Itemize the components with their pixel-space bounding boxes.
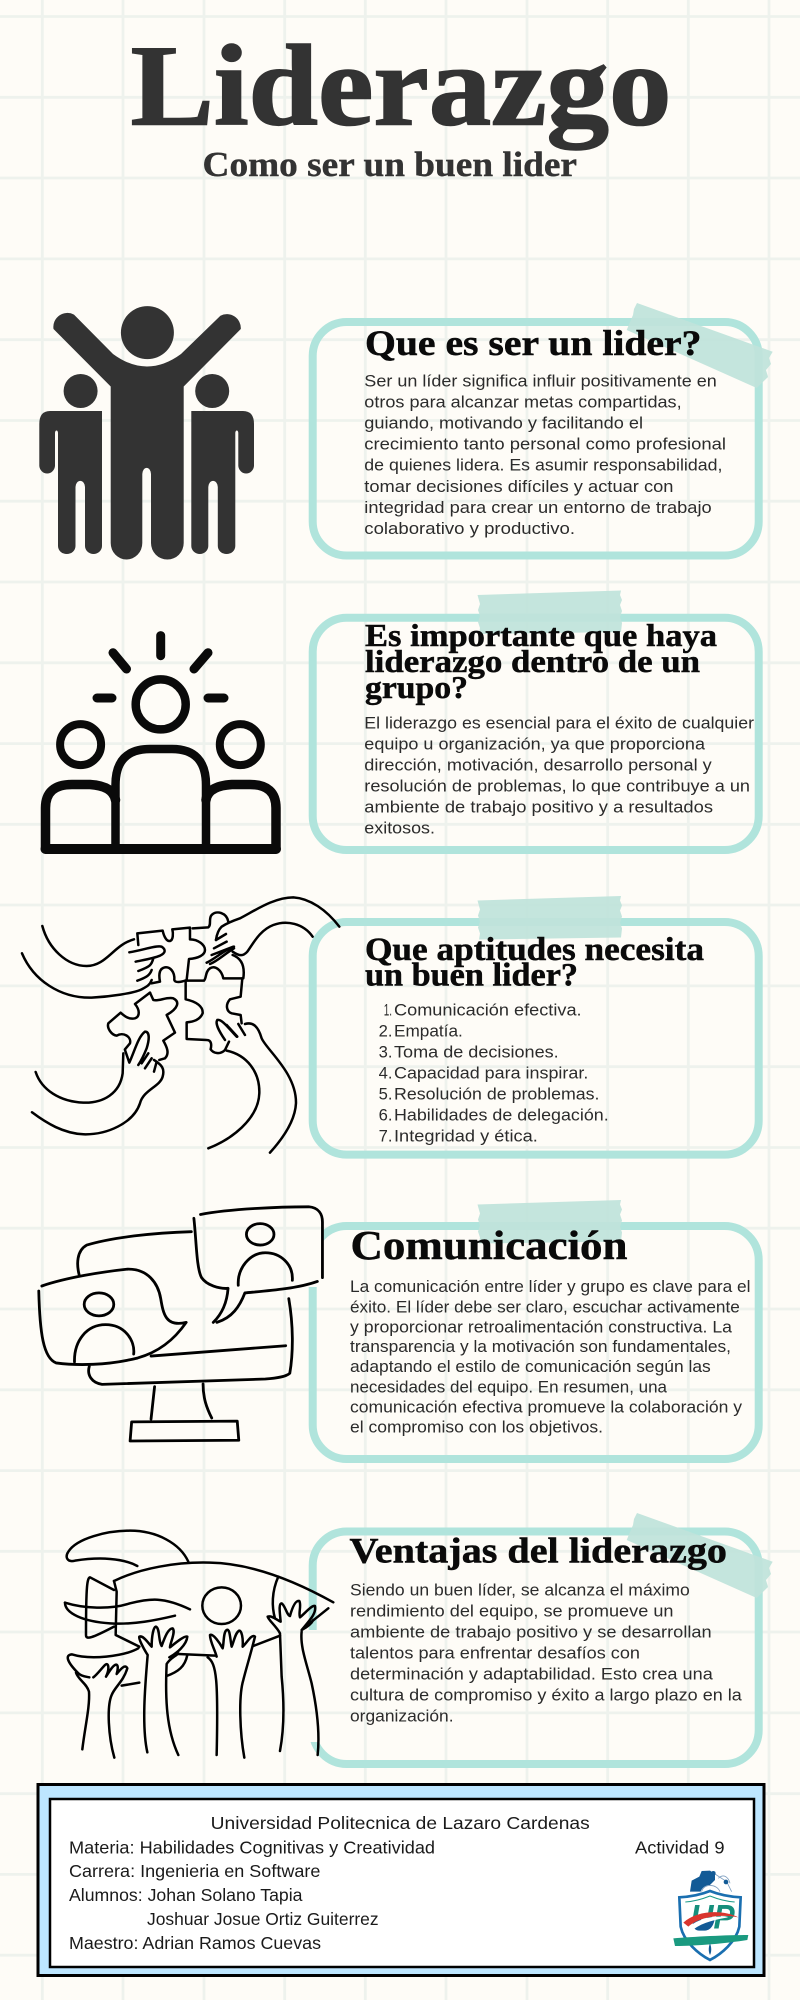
body text: éxito. El líder debe ser claro, escuchar activamente — [350, 1298, 740, 1316]
heading: Ventajas del liderazgo — [350, 1531, 727, 1571]
footer card — [38, 1784, 764, 1976]
body text: ambiente de trabajo positivo y a resultados — [364, 798, 713, 817]
course details: Carrera: Ingenieria en Software — [69, 1861, 320, 1881]
numbered list: Empatía. — [394, 1022, 463, 1041]
body text: otros para alcanzar metas compartidas, — [364, 393, 682, 412]
numbered list: 4. — [379, 1064, 392, 1083]
university name: Universidad Politecnica de Lazaro Cardenas — [211, 1813, 590, 1833]
body text: crecimiento tanto personal como profesional — [364, 435, 726, 454]
numbered list — [379, 1000, 609, 1145]
body text: equipo u organización, ya que proporciona — [364, 734, 706, 754]
numbered list: Toma de decisiones. — [394, 1043, 559, 1062]
body text: cultura de compromiso y éxito a largo plazo en la — [350, 1686, 743, 1704]
numbered list: Resolución de problemas. — [394, 1084, 600, 1103]
icon: rocket lifted by hands — [65, 1531, 333, 1758]
panel: importancia del liderazgo — [313, 590, 759, 850]
numbered list: Habilidades de delegación. — [394, 1105, 609, 1124]
course details: Maestro: Adrian Ramos Cuevas — [69, 1933, 321, 1953]
course details: Joshuar Josue Ortiz Guiterrez — [147, 1909, 379, 1929]
activity label: Actividad 9 — [635, 1837, 724, 1857]
body text: talentos para enfrentar desafíos con — [350, 1643, 640, 1662]
body text: guiando, motivando y facilitando el — [364, 414, 643, 433]
body text: transparencia y la motivación son fundamentales, — [350, 1338, 731, 1356]
body text: colaborativo y productivo. — [364, 519, 575, 538]
body text: Siendo un buen líder, se alcanza el máximo — [350, 1581, 690, 1600]
body text: tomar decisiones difíciles y actuar con — [364, 477, 674, 496]
heading: Es importante que haya — [365, 617, 717, 653]
numbered list: 1. — [384, 1000, 392, 1020]
numbered list: Comunicación efectiva. — [394, 1000, 582, 1020]
heading — [365, 617, 717, 705]
numbered list: Integridad y ética. — [394, 1126, 538, 1145]
panel: aptitudes — [313, 896, 759, 1155]
body text: necesidades del equipo. En resumen, una — [350, 1378, 668, 1396]
course details — [69, 1837, 435, 1953]
body text: Ser un líder significa influir positivamente en — [364, 372, 717, 390]
icon: hands assembling puzzle — [22, 897, 339, 1153]
panel: ventajas del liderazgo — [313, 1513, 773, 1764]
numbered list: 7. — [379, 1126, 392, 1145]
icon: group of people with raised arms — [39, 306, 254, 560]
icon: university shield logo: UP — [691, 1899, 735, 1937]
icon: university shield logo — [673, 1871, 748, 1960]
body text: El liderazgo es esencial para el éxito de cualquier — [364, 714, 755, 732]
numbered list: 3. — [379, 1043, 392, 1062]
body text: determinación y adaptabilidad. Esto crea una — [350, 1664, 714, 1683]
panel: comunicacion — [313, 1200, 759, 1459]
course details: Alumnos: Johan Solano Tapia — [69, 1885, 303, 1905]
heading: Que es ser un lider? — [365, 323, 702, 363]
body text: La comunicación entre líder y grupo es clave para el — [350, 1278, 750, 1296]
body text: exitosos. — [364, 819, 435, 838]
numbered list: 5. — [379, 1084, 392, 1103]
numbered list: 6. — [379, 1105, 392, 1124]
heading: liderazgo dentro de un — [365, 643, 700, 679]
body text: adaptando el estilo de comunicación según las — [350, 1358, 711, 1376]
heading: Que aptitudes necesita — [365, 932, 704, 968]
numbered list: Capacidad para inspirar. — [394, 1064, 588, 1083]
subtitle: Como ser un buen lider — [202, 145, 577, 184]
title: Liderazgo — [131, 22, 671, 149]
body text — [364, 714, 755, 838]
body text — [350, 1581, 743, 1726]
body text: ambiente de trabajo positivo y se desarrollan — [350, 1623, 712, 1642]
heading: un buen lider? — [365, 958, 578, 994]
numbered list: 2. — [379, 1022, 392, 1041]
heading — [365, 932, 704, 994]
body text: el compromiso con los objetivos. — [350, 1419, 603, 1437]
icon: team with light rays — [46, 636, 276, 849]
course details: Materia: Habilidades Cognitivas y Creatividad — [69, 1837, 435, 1857]
body text: resolución de problemas, lo que contribuye a un — [364, 777, 750, 796]
body text: organización. — [350, 1706, 454, 1726]
body text: dirección, motivación, desarrollo personal y — [364, 756, 712, 775]
body text: de quienes lidera. Es asumir responsabilidad, — [364, 456, 722, 475]
panel: que es ser un lider — [313, 303, 773, 556]
body text: y proporcionar retroalimentación constructiva. La — [350, 1318, 733, 1336]
heading: grupo? — [365, 669, 468, 705]
body text — [364, 372, 726, 538]
body text — [350, 1278, 750, 1437]
icon: monitor with chat bubbles — [39, 1207, 322, 1441]
body text: rendimiento del equipo, se promueve un — [350, 1602, 674, 1621]
body text: comunicación efectiva promueve la colaboración y — [350, 1398, 743, 1416]
heading: Comunicación — [350, 1222, 628, 1268]
body text: integridad para crear un entorno de trabajo — [364, 498, 712, 517]
